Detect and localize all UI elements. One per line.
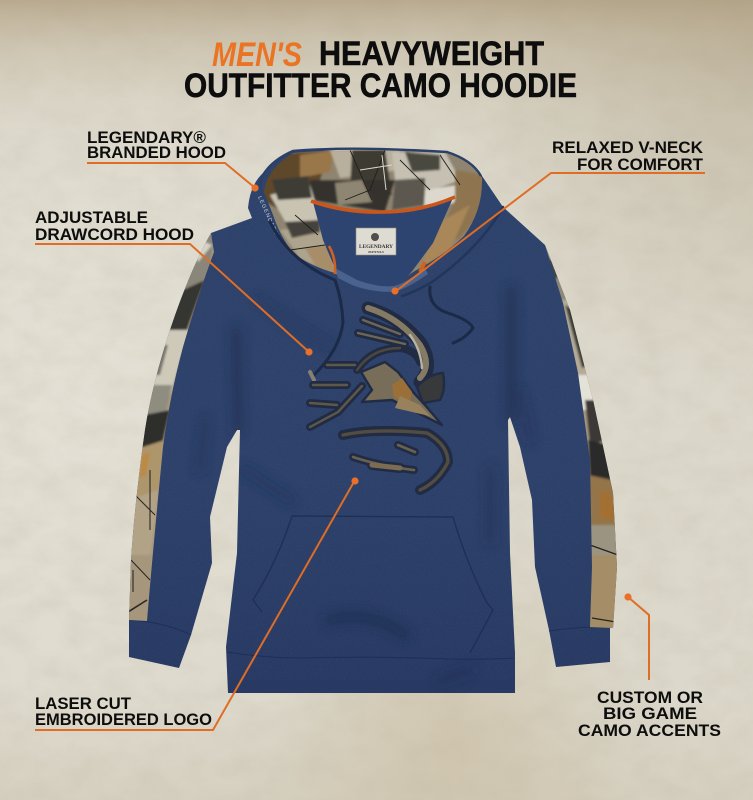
callout: relaxed v-neck: FOR COMFORT bbox=[577, 155, 704, 174]
neck rib collar bbox=[335, 268, 428, 292]
hood interior camo lining bbox=[264, 150, 482, 276]
callout: custom or big game camo accents: CUSTOM OR bbox=[597, 688, 703, 707]
title line: heavyweight: HEAVYWEIGHT bbox=[319, 35, 544, 73]
callout: adjustable drawcord hood: DRAWCORD HOOD bbox=[35, 225, 194, 244]
hoodie: waistband and cuff seams bbox=[129, 620, 590, 659]
logo: dark applique outline bbox=[310, 308, 448, 490]
left camo sleeve panel bbox=[129, 233, 214, 621]
right camo sleeve panel bbox=[545, 246, 617, 628]
embroidered deer logo bbox=[310, 308, 448, 490]
title line: outfitter camo hoodie: OUTFITTER CAMO HOODIE bbox=[184, 67, 577, 105]
hoodie: fabric shading bbox=[231, 288, 530, 641]
callout: adjustable drawcord hood bbox=[35, 208, 313, 356]
logo: ear bbox=[417, 373, 444, 403]
callout: custom or big game camo accents: CAMO ACCENTS bbox=[578, 721, 721, 740]
callout: custom or big game camo accents bbox=[578, 593, 721, 740]
hood branding print: LEGENDARY bbox=[256, 195, 279, 236]
callout: relaxed v-neck: RELAXED V-NECK bbox=[552, 138, 704, 157]
callout: legendary branded hood: LEGENDARY® bbox=[87, 128, 206, 147]
callout: laser cut embroidered logo: LASER CUT bbox=[35, 694, 132, 713]
callout: laser cut embroidered logo: EMBROIDERED LOGO bbox=[35, 710, 212, 729]
hood edge and drawcords bbox=[270, 207, 503, 380]
hood outer blue rim bbox=[260, 149, 481, 198]
callout: adjustable drawcord hood: ADJUSTABLE bbox=[35, 208, 148, 227]
callout: legendary branded hood: BRANDED HOOD bbox=[87, 143, 226, 162]
callout: laser cut embroidered logo bbox=[35, 477, 359, 730]
title accent: men's: MEN'S bbox=[212, 36, 302, 74]
neck tag: WHITETAILS bbox=[368, 250, 384, 254]
callout: custom or big game camo accents: BIG GAME bbox=[603, 704, 697, 723]
hoodie: garment silhouette bbox=[129, 150, 617, 693]
neck tag: LEGENDARY bbox=[359, 245, 393, 250]
orange neck tape bbox=[311, 197, 455, 212]
title bbox=[184, 35, 577, 105]
orange placket trim bbox=[329, 246, 335, 274]
neck tag bbox=[356, 228, 396, 255]
hoodie illustration bbox=[120, 140, 630, 693]
callout: relaxed v-neck bbox=[391, 138, 705, 295]
neck opening bbox=[313, 198, 453, 287]
logo: deer head bbox=[361, 362, 442, 425]
callout: legendary branded hood bbox=[87, 128, 259, 192]
logo: antler camo fill bbox=[310, 308, 448, 490]
hoodie: kangaroo pocket bbox=[253, 516, 493, 653]
